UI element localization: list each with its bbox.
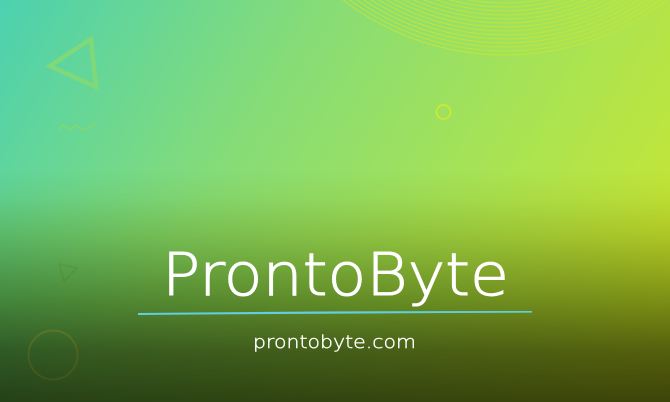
domain name: prontobyte.com [253,332,416,353]
dark vertical shade [0,170,670,402]
icon: small yellow ring [436,105,450,119]
title: ProntoByte [162,240,509,309]
icon: large dim ring [28,330,78,380]
icon: small dim triangle [59,264,77,281]
underline [138,311,532,315]
icon: concentric arcs [240,0,670,55]
icon: squiggle [58,125,95,130]
icon: outlined triangle [50,39,96,87]
